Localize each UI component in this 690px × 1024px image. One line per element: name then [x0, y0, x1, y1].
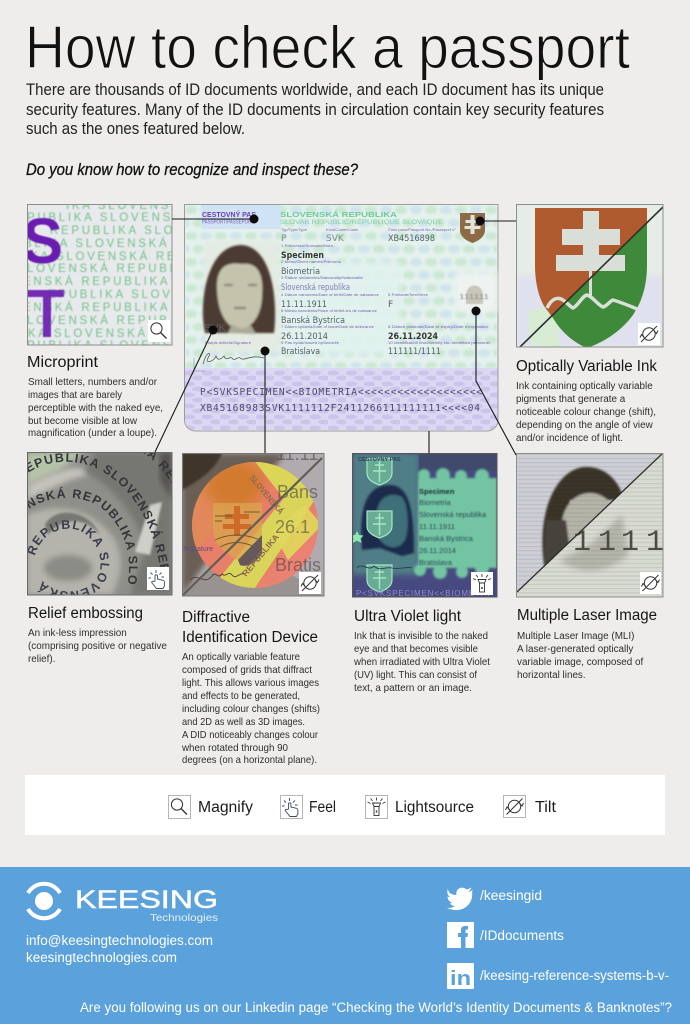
description: multiple laser image: A laser-generated optically — [517, 644, 633, 655]
passport text fields: Biometria — [281, 267, 320, 277]
icon: lightsource — [471, 572, 493, 595]
UV image: Specimen — [419, 487, 455, 496]
logo: KEESING — [75, 886, 218, 914]
legend: tilt: Tilt — [535, 799, 557, 816]
passport text fields: 7 Dátum vydania/Date of issue/Date de délivrance — [281, 324, 375, 329]
description: diffractive identification device: and effects to be generated, — [182, 691, 300, 702]
passport text fields: Slovenská republika — [281, 283, 350, 293]
panel: diffractive identification device — [181, 444, 324, 766]
legend: feel: Feel — [309, 799, 336, 816]
passport text fields: Číslo pasu/Passport No./Passeport n° — [388, 227, 456, 232]
passport text fields: 1 Priezvisko/Surname/Nom — [281, 243, 334, 248]
passport text fields: 11.11.1911 — [281, 300, 327, 310]
description: diffractive identification device: and 2D as well as 3D images. — [182, 717, 305, 728]
passport text fields: SVK — [204, 323, 226, 334]
description: optically variable ink: Ink containing optically variable — [516, 381, 653, 392]
description: ultra violet light: text, a pattern or an image. — [354, 683, 472, 694]
passport text fields: 8 Dátum platnosti/Date of expiry/Date d'expiration — [388, 324, 488, 329]
contact details: keesingtechnologies.com — [26, 950, 177, 965]
description: diffractive identification device: composed of grids that diffract — [182, 665, 312, 676]
icon: tilt — [640, 572, 661, 594]
passport photo — [203, 240, 280, 352]
intro paragraph: security features. Many of the ID documents in circulation contain key security features — [26, 101, 604, 119]
UV image: P<SVKSPECIMEN<<BIOMETRI — [356, 589, 490, 598]
social: linkedin — [447, 963, 669, 990]
question subheading: Do you know how to recognize and inspect these? — [26, 161, 359, 179]
legend: magnify — [168, 796, 253, 818]
passport text fields: PASSPORT/PASSEPORT — [202, 220, 255, 226]
heading: microprint: Microprint — [27, 354, 99, 371]
description: ultra violet light — [353, 631, 490, 694]
description: optically variable ink: noticeable colour change (shift), — [516, 407, 656, 418]
passport text fields — [202, 210, 490, 357]
embossed image: NSKÁ REPUBLIKA SLO — [28, 486, 138, 584]
microprint image: REPUBLIKA SLOVEN — [50, 225, 207, 237]
icon: feel — [147, 567, 169, 590]
hologram image: REPUBLIKA — [240, 532, 281, 578]
hologram coat of arms — [213, 503, 262, 560]
panel: microprint — [27, 204, 172, 438]
microprint image — [28, 205, 172, 344]
description: multiple laser image: Multiple Laser Image (MLI) — [517, 631, 634, 642]
ink image — [516, 204, 663, 348]
UV image: 11.11.1911 — [419, 522, 455, 531]
intro paragraph — [26, 81, 604, 138]
legend — [25, 775, 665, 835]
microprint image: KA SLOVENSKÁ REP — [30, 250, 188, 263]
social: twitter — [447, 888, 542, 910]
passport text fields: Banská Bystrica — [281, 316, 345, 326]
description: optically variable ink: depending on the angle of view — [516, 420, 654, 431]
laser image — [516, 453, 664, 597]
passport text fields: 3 Štátne občianstvo/Nationality/Nationalité — [281, 275, 364, 280]
hologram image: Bratis — [275, 555, 321, 575]
heading: ultra violet light: Ultra Violet light — [354, 608, 462, 625]
description: relief embossing: An ink-less impression — [28, 628, 127, 639]
linkedin prompt: Are you following us on our Linkedin page “Checking the World’s Identity Documents & Banknotes”? — [80, 1000, 672, 1015]
description: multiple laser image: variable image, composed of — [517, 657, 644, 668]
hologram image: SLOVENSKÁ — [247, 473, 286, 516]
callout leader lines — [155, 219, 516, 455]
icon: magnify — [148, 320, 170, 342]
legend: lightsource — [366, 796, 474, 818]
social: facebook: /IDdocuments — [480, 928, 564, 943]
description: diffractive identification device: A DID noticeably changes colour — [182, 730, 319, 741]
passport text fields: P — [281, 234, 287, 244]
description: ultra violet light: (UV) light. This can consist of — [354, 670, 477, 681]
legend: tilt — [504, 796, 557, 818]
laser image: 1111 — [573, 526, 664, 560]
microprint image: BLIKA SLOVENSKÁ — [24, 237, 169, 250]
description: microprint: Small letters, numbers and/or — [28, 377, 158, 388]
panel: relief embossing — [27, 452, 172, 665]
microprint image: IKA SLOVENSKÁ — [22, 327, 148, 340]
passport text fields: Podpis držiteľa/Signature — [205, 340, 252, 345]
passport text fields: Specimen — [281, 251, 324, 261]
passport text fields: F — [388, 300, 393, 310]
description: microprint: perceptible with the naked eye, — [28, 403, 163, 414]
passport text fields: CESTOVNÝ PAS — [202, 210, 256, 219]
legend: feel — [280, 796, 336, 818]
hologram image: 26.1 — [275, 517, 310, 537]
legend: magnify: Magnify — [198, 799, 253, 816]
heading: relief embossing: Relief embossing — [28, 605, 143, 622]
passport text fields: SLOVENSKÁ REPUBLIKA — [280, 210, 398, 219]
UV image: Slovenská republika — [419, 510, 487, 519]
holder signature — [203, 353, 264, 364]
UV image: CESTOVNÝ PAS — [358, 456, 401, 463]
heading: optically variable ink: Optically Variable Ink — [516, 358, 657, 375]
UV image: Biometria — [419, 498, 452, 507]
social: facebook — [447, 922, 564, 948]
heading: diffractive identification device — [182, 609, 318, 646]
description: diffractive identification device — [181, 652, 320, 766]
UV image — [350, 453, 497, 598]
description: relief embossing: (comprising positive or negative — [28, 641, 167, 652]
footer — [0, 867, 690, 1024]
description: multiple laser image: horizontal lines. — [517, 670, 586, 681]
embossed image: REPUBLIKA SLOVENSKÁ — [28, 520, 110, 594]
machine readable zone — [200, 387, 482, 414]
logo: Technologies — [150, 912, 218, 924]
description: optically variable ink: pigments that generate a — [516, 394, 626, 405]
description: ultra violet light: when irradiated with Ultra Violet — [353, 657, 490, 668]
passport text fields: 5 Pohlavie/Sex/Sexe — [388, 292, 429, 297]
social: linkedin: /keesing-reference-systems-b-v- — [480, 968, 669, 983]
intro paragraph: There are thousands of ID documents worldwide, and each ID document has its unique — [26, 81, 604, 99]
embossed image: KÁ REP — [144, 453, 172, 483]
heading: multiple laser image: Multiple Laser Image — [517, 607, 657, 624]
passport text fields: 26.11.2024 — [388, 332, 438, 342]
microprint image: S — [22, 205, 63, 277]
description: optically variable ink: and/or incidence of light. — [516, 433, 623, 444]
description: diffractive identification device: light. This allows various images — [182, 678, 319, 689]
hologram image: Bans — [277, 482, 318, 502]
passport text fields: XB4516898 — [388, 234, 435, 244]
hologram image: Signature — [183, 546, 213, 553]
intro paragraph: such as the ones featured below. — [26, 120, 245, 138]
social: twitter: /keesingid — [480, 888, 542, 903]
contact details — [26, 933, 213, 965]
microprint image: ENSKÁ REPUBLIKA — [23, 275, 170, 288]
microprint image: LOVENSKÁ REPUBL — [27, 262, 179, 275]
hologram image — [182, 444, 324, 596]
UV image: Bratislava — [419, 558, 453, 567]
panel: ultra violet light — [350, 453, 497, 694]
panel: optically variable ink — [516, 204, 663, 444]
description: microprint — [28, 377, 163, 439]
heading: diffractive identification device: Identification Device — [182, 629, 318, 646]
microprint image: ENSKÁ REPUBLIKA — [23, 301, 170, 314]
description: microprint: magnification (under a loupe). — [28, 428, 157, 439]
passport text fields: SLOVAK REPUBLIC/RÉPUBLIQUE SLOVAQUE — [280, 217, 444, 226]
description: microprint: but become visible at low — [28, 416, 138, 427]
description: multiple laser image — [517, 631, 644, 681]
heading: diffractive identification device: Diffractive — [182, 609, 250, 626]
UV image: 26.11.2014 — [419, 546, 456, 555]
icon: tilt — [299, 572, 321, 594]
description: diffractive identification device: degrees (on a horizontal plane). — [182, 755, 317, 766]
description: microprint: images that are barely — [28, 390, 123, 401]
hologram image: 11.11 — [276, 444, 318, 464]
description: optically variable ink — [516, 381, 656, 444]
logo — [28, 884, 218, 924]
passport text fields: SVK — [326, 234, 345, 244]
description: diffractive identification device: An optically variable feature — [182, 652, 300, 663]
microprint image: PUBLIKA SLOVENSK — [27, 340, 183, 352]
passport text fields: 9 Pas vydal/Issued by/Autorité — [281, 340, 340, 345]
ghost image: 111111 — [459, 294, 489, 301]
passport text fields: 2 Meno/Given names/Prénoms — [281, 259, 341, 264]
contact details: info@keesingtechnologies.com — [26, 933, 213, 948]
description: relief embossing — [28, 628, 167, 665]
passport text fields: Typ/Type/Type — [281, 227, 308, 232]
description: diffractive identification device: including colour changes (shifts) — [182, 704, 320, 715]
passport text fields: Bratislava — [281, 347, 320, 357]
legend: lightsource: Lightsource — [395, 799, 474, 816]
passport text fields: 10 Identifikačné číslo/Identity No./Identifiant personnel — [388, 340, 490, 345]
UV image: Banská Bystrica — [419, 534, 474, 543]
passport text fields: 6 Miesto narodenia/Place of birth/Lieu de naissance — [281, 308, 378, 313]
passport text fields: 26.11.2014 — [281, 332, 328, 342]
description: ultra violet light: Ink that is invisible to the naked — [354, 631, 488, 642]
machine readable zone: P<SVKSPECIMEN<<BIOMETRIA<<<<<<<<<<<<<<<<<<< — [200, 387, 482, 398]
microprint image: EPUBLIKA SLOVEN — [48, 289, 194, 301]
passport text fields: Kód/Code/Code — [326, 227, 359, 232]
description: relief embossing: relief). — [28, 654, 55, 665]
passport text fields: 111111/1111 — [388, 347, 441, 357]
microprint image: LOVENSKÁ REPUB — [27, 314, 170, 327]
embossed image: EPUBLIKA SLOVENSKÁ REP — [28, 453, 169, 567]
machine readable zone: XB45168983SVK1111112F2411266111111111<<<<04 — [200, 403, 480, 414]
microprint image: IKA SLOVENSKÁ — [66, 199, 192, 212]
panel: multiple laser image — [516, 453, 664, 681]
title: How to check a passport — [25, 14, 630, 81]
icon: tilt — [638, 323, 660, 345]
small coat of arms — [460, 213, 485, 243]
callout dots — [208, 214, 484, 356]
passport text fields: 4 Dátum narodenia/Date of birth/Date de naissance — [281, 292, 380, 297]
passport specimen — [184, 204, 498, 431]
description: ultra violet light: eye and that becomes visible — [354, 644, 478, 655]
microprint image: PUBLIKA SLOVENSKÁ — [27, 211, 194, 224]
ghost image — [459, 286, 489, 304]
description: diffractive identification device: when rotated through 90 — [181, 743, 288, 754]
social: linkedin: in — [450, 968, 471, 990]
